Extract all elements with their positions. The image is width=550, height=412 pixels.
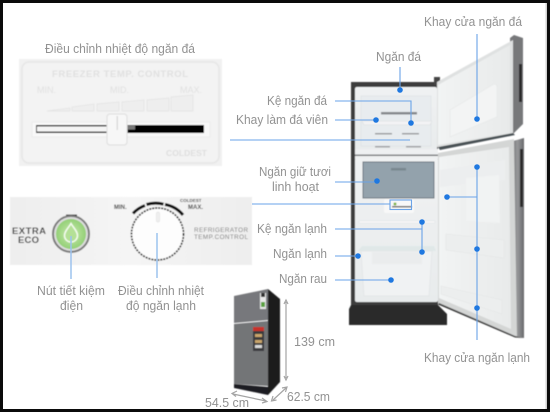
panel: freezer temperature control: COLDEST (166, 148, 208, 158)
icon: eco button (53, 214, 89, 252)
fridge compartment (355, 158, 438, 302)
callout dots (355, 87, 480, 311)
icon: fridge temperature dial: MIN. (114, 205, 127, 211)
arrow: height (284, 300, 288, 380)
text: extra eco (12, 226, 46, 246)
refrigerator open front view (349, 35, 524, 338)
arrow: width (232, 391, 267, 403)
cabinet body (351, 82, 438, 308)
blue callout lines and dots (71, 34, 477, 340)
labels: độ ngăn lạnh (126, 299, 196, 313)
panel: freezer temperature control: MIN. (37, 85, 56, 95)
dimension: height: 139 cm (294, 335, 335, 349)
labels: điện (60, 299, 83, 313)
heading: freezer temperature control: Điều chỉnh nhiệt độ ngăn đá (45, 42, 195, 56)
labels: Nút tiết kiệm (37, 284, 105, 298)
panel: freezer temperature control (19, 59, 222, 166)
icon: fridge temperature dial: TEMP.CONTROL (194, 234, 248, 241)
labels: Kệ ngăn lạnh (257, 222, 327, 236)
labels (37, 15, 530, 365)
fridge door (438, 139, 524, 338)
text: extra eco: EXTRA (12, 226, 46, 237)
labels: Ngăn giữ tươi (259, 165, 331, 179)
labels: Khay làm đá viên (236, 113, 328, 127)
labels: Kệ ngăn đá (267, 94, 327, 108)
base (349, 305, 447, 325)
icon: fridge temperature dial: REFRIGERATOR (194, 227, 248, 234)
freezer compartment (355, 87, 437, 151)
fridge door outer edge (513, 138, 524, 338)
icon: fridge temperature dial (114, 198, 248, 260)
control display (384, 199, 414, 213)
panel: freezer temperature control: MAX. (180, 85, 202, 95)
small refrigerator with dimensions (205, 289, 335, 410)
dimension: width: 54.5 cm (205, 396, 249, 410)
freezer door outer edge (510, 35, 523, 134)
vegetable drawer (361, 251, 432, 296)
freezer door (437, 40, 515, 150)
icon: fridge temperature dial: COLDEST (180, 198, 202, 203)
divider (355, 149, 438, 159)
fridge illustration (234, 289, 280, 395)
panel: fridge control strip (10, 197, 252, 265)
labels: Điều chỉnh nhiệt (118, 284, 204, 298)
labels: Ngăn đá (376, 50, 421, 64)
arrow: depth (272, 387, 287, 401)
panel: freezer temperature control: FREEZER TEMP. CONTROL (52, 69, 188, 80)
text: extra eco: ECO (18, 235, 39, 246)
labels: Khay cửa ngăn đá (424, 15, 522, 29)
icon: fridge temperature dial: MAX. (188, 205, 203, 211)
panel: freezer temperature control: MID. (110, 85, 129, 95)
flexible fresh zone drawer (363, 162, 434, 198)
shelves (359, 221, 435, 223)
labels: Ngăn rau (279, 272, 327, 286)
labels: linh hoạt (272, 180, 320, 194)
labels: Khay cửa ngăn lạnh (424, 351, 530, 365)
labels: Ngăn lạnh (273, 247, 327, 261)
dimension: depth: 62.5 cm (287, 390, 330, 404)
